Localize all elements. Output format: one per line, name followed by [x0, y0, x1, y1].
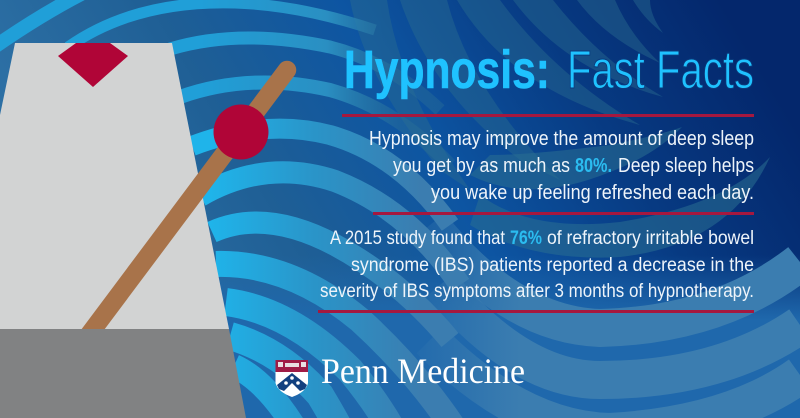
- fact: IBS study: syndrome (IBS) patients reported a decrease in the: [351, 255, 754, 276]
- fact: deep sleep: you get by as much as: [393, 155, 570, 177]
- fact: IBS study: A 2015 study found that: [330, 228, 506, 249]
- fact: deep sleep: you wake up feeling refreshed each day.: [431, 182, 754, 204]
- metronome body: [0, 43, 229, 329]
- fact: deep sleep: 80%.: [575, 155, 612, 177]
- swirl crescents behind the text: [470, 127, 770, 258]
- title: [344, 40, 754, 100]
- logo: Penn Medicine wordmark: Penn Medicine: [321, 351, 525, 391]
- fact: IBS study: of refractory irritable bowel: [547, 228, 754, 249]
- fact: IBS study: severity of IBS symptoms after 3 months of hypnotherapy.: [320, 281, 754, 302]
- metronome arm: [85, 70, 287, 340]
- fact: deep sleep: Hypnosis may improve the amount of deep sleep: [369, 128, 754, 150]
- logo: Penn shield: [276, 360, 308, 397]
- rule between facts: [373, 212, 754, 215]
- fact: deep sleep: [369, 128, 754, 204]
- metronome weight: [214, 104, 268, 160]
- rule under facts: [318, 310, 754, 313]
- background swirl bands lower: [192, 129, 460, 418]
- fact: deep sleep: Deep sleep helps: [618, 155, 754, 177]
- metronome top diamond: [58, 43, 128, 87]
- top crescent swirls: [350, 0, 663, 190]
- lower background tone: [0, 255, 800, 418]
- title: Hypnosis:: [344, 40, 550, 100]
- background swirl bands right side: [430, 225, 800, 418]
- fact: IBS study: 76%: [510, 228, 542, 249]
- fact: IBS study: [320, 228, 754, 302]
- metronome base: [0, 329, 246, 418]
- background swirl bands upper: [0, 0, 450, 165]
- rule under title: [342, 114, 754, 117]
